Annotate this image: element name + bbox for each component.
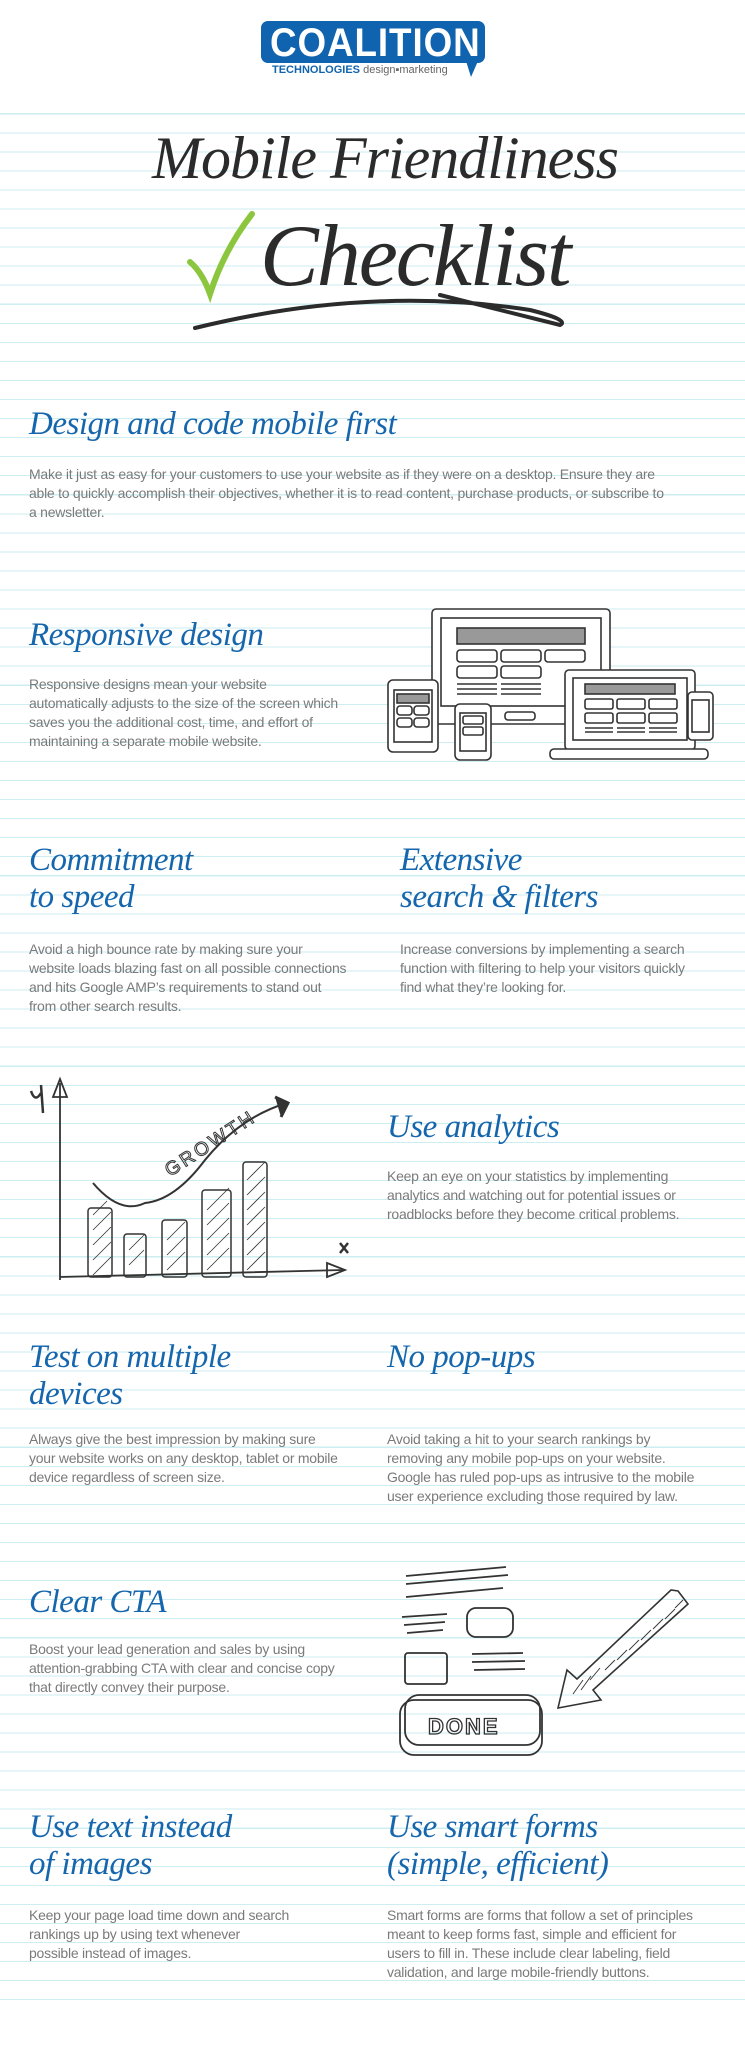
heading: use text instead of images: of images — [29, 1846, 152, 1882]
text: no pop-ups: user experience excluding those required by law. — [387, 1488, 678, 1504]
heading: smart forms: Use smart forms — [387, 1809, 598, 1845]
illustration: done button form — [399, 1566, 689, 1756]
text: design mobile first — [29, 466, 664, 520]
heading: extensive search: Extensive — [400, 842, 522, 878]
text: test on multiple devices — [29, 1431, 338, 1485]
text: clear cta: attention-grabbing CTA with clear and concise copy — [29, 1660, 335, 1676]
title: Checklist — [260, 208, 569, 305]
text: responsive design: saves you the additional cost, time, and effort of — [29, 714, 313, 730]
text: design mobile first: Make it just as easy for your customers to use your website as if they were on a desktop. Ensure they are — [29, 466, 655, 482]
heading: use text instead of images: Use text instead — [29, 1809, 232, 1845]
text: no pop-ups: Google has ruled pop-ups as intrusive to the mobile — [387, 1469, 694, 1485]
text: use analytics: roadblocks before they become critical problems. — [387, 1206, 679, 1222]
text: smart forms: validation, and large mobile-friendly buttons. — [387, 1964, 649, 1980]
text: smart forms: meant to keep forms fast, simple and efficient for — [387, 1926, 676, 1942]
heading: test on multiple devices — [29, 1339, 231, 1412]
chart: growth — [30, 1076, 349, 1280]
text: smart forms: Smart forms are forms that follow a set of principles — [387, 1907, 693, 1923]
text: no pop-ups — [387, 1431, 694, 1504]
text: use text instead of images: Keep your page load time down and search — [29, 1907, 289, 1923]
heading: clear cta: Clear CTA — [29, 1584, 166, 1620]
heading: no pop-ups: No pop-ups — [387, 1339, 535, 1375]
title: Mobile Friendliness — [152, 125, 618, 191]
text: commitment to speed: and hits Google AMP’s requirements to stand out — [29, 979, 321, 995]
text: use analytics: analytics and watching out for potential issues or — [387, 1187, 676, 1203]
text: commitment to speed: website loads blazing fast on all possible connections — [29, 960, 346, 976]
text: no pop-ups: Avoid taking a hit to your search rankings by — [387, 1431, 650, 1447]
text: use analytics — [387, 1168, 679, 1222]
heading: commitment to speed: Commitment — [29, 842, 193, 878]
text: no pop-ups: removing any mobile pop-ups on your website. — [387, 1450, 666, 1466]
text: smart forms — [387, 1907, 693, 1980]
text: design mobile first: able to quickly accomplish their objectives, whether it is to read content, purchase products, or subscribe to — [29, 485, 664, 501]
text: test on multiple devices: device regardless of screen size. — [29, 1469, 225, 1485]
heading: test on multiple devices: Test on multiple — [29, 1339, 231, 1375]
heading: design mobile first: Design and code mobile first — [29, 406, 396, 442]
title — [151, 125, 618, 330]
icon: check mark — [187, 211, 255, 304]
heading: responsive design: Responsive design — [29, 617, 263, 653]
text: use analytics: Keep an eye on your statistics by implementing — [387, 1168, 668, 1184]
text: extensive search: find what they’re looking for. — [400, 979, 566, 995]
text: extensive search — [400, 941, 685, 995]
text: use text instead of images: possible instead of images. — [29, 1945, 191, 1961]
text: use text instead of images — [29, 1907, 289, 1961]
logo: TECHNOLOGIES design▪marketing — [272, 64, 448, 76]
heading: commitment to speed — [29, 842, 194, 915]
text: commitment to speed: Avoid a high bounce rate by making sure your — [29, 941, 303, 957]
heading: smart forms: (simple, efficient) — [387, 1846, 608, 1882]
text: commitment to speed — [29, 941, 346, 1014]
text: clear cta: that directly convey their purpose. — [29, 1679, 230, 1695]
heading: test on multiple devices: devices — [29, 1376, 123, 1412]
heading: commitment to speed: to speed — [29, 879, 134, 915]
text: test on multiple devices: your website works on any desktop, tablet or mobile — [29, 1450, 338, 1466]
text: clear cta: Boost your lead generation and sales by using — [29, 1641, 305, 1657]
illustration: done button form: DONE — [428, 1714, 500, 1739]
text: responsive design: automatically adjusts to the size of the screen which — [29, 695, 338, 711]
chart: growth: GROWTH — [161, 1107, 260, 1181]
heading: extensive search — [400, 842, 598, 915]
text: use text instead of images: rankings up by using text whenever — [29, 1926, 240, 1942]
text: test on multiple devices: Always give the best impression by making sure — [29, 1431, 316, 1447]
heading: use text instead of images — [29, 1809, 232, 1882]
text: smart forms: users to fill in. These include clear labeling, field — [387, 1945, 670, 1961]
logo: COALITION — [270, 21, 481, 65]
illustration: devices — [387, 608, 714, 761]
heading: extensive search: search & filters — [400, 879, 598, 915]
text: responsive design — [29, 676, 338, 749]
text: extensive search: Increase conversions by implementing a search — [400, 941, 684, 957]
text: commitment to speed: from other search results. — [29, 998, 181, 1014]
heading: use analytics: Use analytics — [387, 1109, 559, 1145]
text: clear cta — [29, 1641, 335, 1695]
text: responsive design: maintaining a separate mobile website. — [29, 733, 262, 749]
heading: smart forms — [387, 1809, 608, 1882]
text: responsive design: Responsive designs mean your website — [29, 676, 267, 692]
text: design mobile first: a newsletter. — [29, 504, 104, 520]
text: extensive search: function with filtering to help your visitors quickly — [400, 960, 685, 976]
